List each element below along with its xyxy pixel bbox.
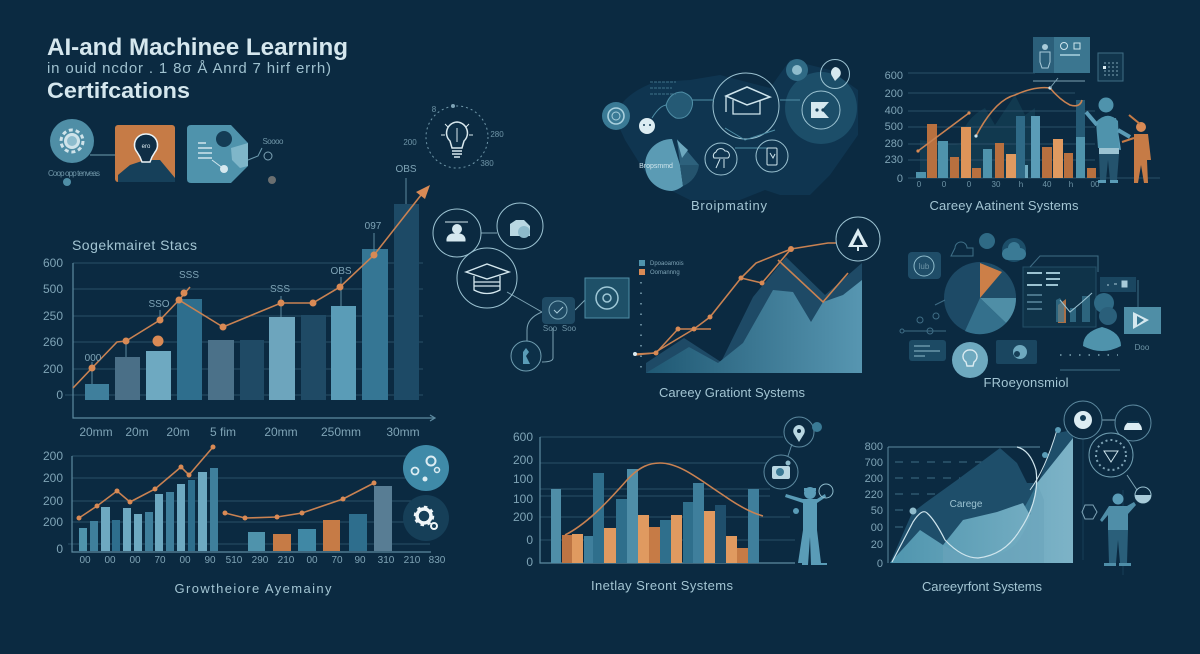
line right group xyxy=(222,480,376,520)
trend lines xyxy=(916,86,1082,153)
icon: camera xyxy=(764,455,798,489)
y axis labels xyxy=(43,449,63,556)
y axis labels: 200 xyxy=(865,473,883,485)
figure: presenter xyxy=(1086,98,1130,183)
x axis labels: 70 xyxy=(154,555,166,566)
y axis labels: 0 xyxy=(56,542,63,556)
x axis labels xyxy=(79,555,446,566)
chart: area with ring curve xyxy=(865,401,1151,594)
y axis labels: 800 xyxy=(865,441,883,453)
bars right group xyxy=(248,486,392,551)
x axis labels: 30mm xyxy=(386,425,420,439)
icon: graduation cap xyxy=(713,73,779,139)
icon: check badge: Soo xyxy=(562,324,577,333)
y axis labels: 200 xyxy=(43,515,63,529)
y axis labels: 0 xyxy=(56,388,63,402)
icon: pin circle xyxy=(820,60,850,88)
data labels: SSS xyxy=(179,270,199,281)
panel: profile card xyxy=(1033,37,1090,73)
icon: lightbulb with dotted orbit: 280 xyxy=(490,130,504,139)
icon: leaf blob xyxy=(666,92,693,118)
y axis labels: 50 xyxy=(871,505,883,517)
line left group xyxy=(76,444,216,520)
icon: robot circle xyxy=(1064,401,1102,439)
icon: tablet circle xyxy=(802,91,840,129)
y axis labels: 200 xyxy=(43,471,63,485)
icon: gears circle light xyxy=(403,445,449,491)
y axis labels: 00 xyxy=(871,522,883,534)
x axis labels: 00 xyxy=(1091,180,1100,189)
icon: phone circle xyxy=(756,140,788,172)
icon: note card xyxy=(909,340,946,361)
icon: hexagon xyxy=(1082,505,1097,519)
chart: growth bars and lines xyxy=(43,444,449,596)
icon: lightbulb with dotted orbit: 8 xyxy=(432,105,437,114)
bars left group xyxy=(79,468,218,551)
y axis labels: 220 xyxy=(865,489,883,501)
x axis labels: 90 xyxy=(204,555,216,566)
icon: lightbulb head on orange card: ero xyxy=(142,144,151,150)
x axis labels: 20m xyxy=(166,425,190,439)
x axis labels: h xyxy=(1069,180,1073,189)
icon: gears circle dark xyxy=(403,495,449,541)
y axis labels: 600 xyxy=(513,430,533,444)
x axis labels: 20mm xyxy=(79,425,113,439)
x axis labels: 00 xyxy=(129,555,141,566)
y axis labels: 100 xyxy=(513,472,533,486)
y axis labels: 500 xyxy=(885,121,903,133)
network of icons: education xyxy=(433,203,629,371)
y axis labels: 600 xyxy=(885,70,903,82)
x axis labels xyxy=(917,180,1100,189)
data labels: 097 xyxy=(365,221,382,232)
icon: robot face xyxy=(639,118,655,134)
icon: badge xyxy=(908,252,941,279)
icon: lightbulb with dotted orbit: 200 xyxy=(403,138,417,147)
data labels: OBS xyxy=(330,266,352,277)
icon: badge: lub xyxy=(919,262,930,271)
y axis labels: 0 xyxy=(526,533,533,547)
icon: lightbulb with dotted orbit: 380 xyxy=(480,159,494,168)
chart title: Sogekmairet Stacs xyxy=(72,237,197,253)
panel: report card xyxy=(1023,267,1096,327)
icon: people circle xyxy=(497,203,543,249)
y axis labels: 500 xyxy=(43,282,63,296)
y axis labels: 200 xyxy=(885,88,903,100)
x axis labels: 5 fim xyxy=(210,425,236,439)
icon: team circle xyxy=(433,209,481,257)
y axis labels: 260 xyxy=(43,335,63,349)
figure: orange worker xyxy=(1122,115,1151,183)
dark area xyxy=(890,430,1073,563)
trend line with arrow xyxy=(73,185,430,388)
legend: Dpoaoamois xyxy=(650,261,684,267)
x axis labels: 70 xyxy=(331,555,343,566)
dark map blobs xyxy=(615,60,858,200)
second heading line: Certifcations xyxy=(47,78,190,103)
ring curve xyxy=(892,447,1037,562)
legend: Oomannng xyxy=(650,270,680,276)
curve xyxy=(565,463,763,535)
icon: tree circle xyxy=(705,143,737,175)
x axis labels: 0 xyxy=(942,180,947,189)
x axis labels: 310 xyxy=(378,555,395,566)
data labels xyxy=(85,164,417,364)
icon: image card xyxy=(996,340,1037,364)
x axis labels: 20mm xyxy=(264,425,298,439)
panel: small sparkline card xyxy=(1100,277,1136,292)
panel: education concept map xyxy=(602,59,858,213)
figure: seated person xyxy=(1083,293,1121,351)
y axis labels: 600 xyxy=(43,256,63,270)
chart: area chart xyxy=(633,217,880,400)
panel: professional dashboard xyxy=(900,233,1161,390)
x axis labels: 510 xyxy=(226,555,243,566)
caption: Inetlay Sreont Systems xyxy=(591,578,734,593)
bars xyxy=(85,204,419,400)
title block xyxy=(47,34,348,103)
x axis labels: 40 xyxy=(1043,180,1052,189)
y axis labels: 700 xyxy=(865,457,883,469)
figure: engineer xyxy=(785,487,827,565)
light area xyxy=(890,438,1073,563)
x axis labels: 0 xyxy=(967,180,972,189)
y axis labels: 0 xyxy=(877,558,883,570)
icons: people circles xyxy=(951,233,1026,262)
icon: document tag xyxy=(187,125,248,183)
y axis labels xyxy=(43,256,63,402)
icon: lightbulb head on orange card xyxy=(115,125,175,182)
bars xyxy=(916,100,1096,178)
icon: check badge xyxy=(542,297,577,333)
subtitle: in ouid ncdor . 1 8σ Å Anrd 7 hirf errh) xyxy=(47,60,331,77)
icon: helmet circle xyxy=(1115,405,1151,441)
x axis labels: 210 xyxy=(404,555,421,566)
icon: graduation cap circle xyxy=(457,248,517,308)
icon: gear badge xyxy=(50,119,94,163)
x axis labels: 20m xyxy=(125,425,149,439)
data labels: 000 xyxy=(85,353,102,364)
y axis labels: 200 xyxy=(513,510,533,524)
data labels: OBS xyxy=(395,164,417,175)
x axis labels: 90 xyxy=(354,555,366,566)
icon: location pin xyxy=(784,417,822,447)
icon: shield dial xyxy=(1089,433,1133,477)
chart: main bar and line chart xyxy=(43,164,435,439)
x axis labels: 250mm xyxy=(321,425,361,439)
panel: small grid card xyxy=(1098,53,1123,81)
mid crescent xyxy=(943,450,1073,563)
icon row: certification badges: Coop opp tenveas xyxy=(48,169,100,178)
y axis labels: 280 xyxy=(885,138,903,150)
caption: Careey Aatinent Systems xyxy=(930,198,1079,213)
x axis labels: 290 xyxy=(252,555,269,566)
legend xyxy=(639,260,684,276)
x axis labels xyxy=(79,425,420,439)
y axis labels: 0 xyxy=(526,555,533,569)
caption: Growtheiore Ayemainy xyxy=(174,581,332,596)
icon: play button xyxy=(1124,307,1161,334)
caption: Careey Grationt Systems xyxy=(659,385,806,400)
bars xyxy=(551,469,759,563)
y axis labels xyxy=(885,70,903,185)
x axis labels: 30 xyxy=(992,180,1001,189)
x axis labels: 00 xyxy=(179,555,191,566)
x axis labels: 00 xyxy=(79,555,91,566)
icon: small person circle xyxy=(511,341,541,371)
light area xyxy=(646,280,862,373)
y axis labels: 400 xyxy=(885,105,903,117)
y axis labels: 230 xyxy=(885,154,903,166)
icon: target xyxy=(602,102,630,130)
panel: professional dashboard: Doo xyxy=(1135,343,1150,352)
y axis labels: 200 xyxy=(43,362,63,376)
x axis labels: 0 xyxy=(917,180,922,189)
y axis labels xyxy=(865,441,883,570)
caption: Careeyrfont Systems xyxy=(922,579,1042,594)
chart: career bars with figures xyxy=(885,37,1160,213)
icon: half dome xyxy=(1135,487,1151,503)
data labels: SSS xyxy=(270,284,290,295)
x axis labels: 830 xyxy=(429,555,446,566)
x axis labels: 00 xyxy=(104,555,116,566)
icon: target panel xyxy=(585,278,629,318)
y axis labels: 20 xyxy=(871,539,883,551)
icon: lightbulb circle xyxy=(952,342,988,378)
y axis labels: 200 xyxy=(43,449,63,463)
caption: Broipmatiny xyxy=(691,198,768,213)
main heading: AI-and Machinee Learning xyxy=(47,34,348,61)
y axis labels xyxy=(513,430,533,569)
pie chart xyxy=(639,139,699,191)
y axis labels: 200 xyxy=(513,453,533,467)
chart: mixed bars with curve xyxy=(513,417,833,593)
pie chart xyxy=(944,262,1016,334)
x axis labels: 210 xyxy=(278,555,295,566)
y axis labels: 0 xyxy=(897,173,903,185)
pie chart: Bropsmmd xyxy=(639,163,673,170)
icon row: certification badges: Soooo xyxy=(262,137,284,146)
figure: analyst xyxy=(1100,494,1136,566)
dark area xyxy=(646,257,862,373)
icon: tree badge circle xyxy=(836,217,880,261)
y axis labels: 100 xyxy=(513,492,533,506)
icon: lightbulb with dotted orbit xyxy=(403,104,504,168)
icon: check badge: Soo xyxy=(543,324,558,333)
data labels: SSO xyxy=(148,299,170,310)
area label: Carege xyxy=(950,499,983,510)
icon row: certification badges xyxy=(48,119,284,186)
x axis labels: 00 xyxy=(306,555,318,566)
orange lines xyxy=(633,243,848,356)
x axis labels: h xyxy=(1019,180,1023,189)
small network nodes xyxy=(900,300,946,334)
caption: FRoeyonsmiol xyxy=(984,375,1069,390)
y axis labels: 250 xyxy=(43,309,63,323)
y axis labels: 200 xyxy=(43,494,63,508)
